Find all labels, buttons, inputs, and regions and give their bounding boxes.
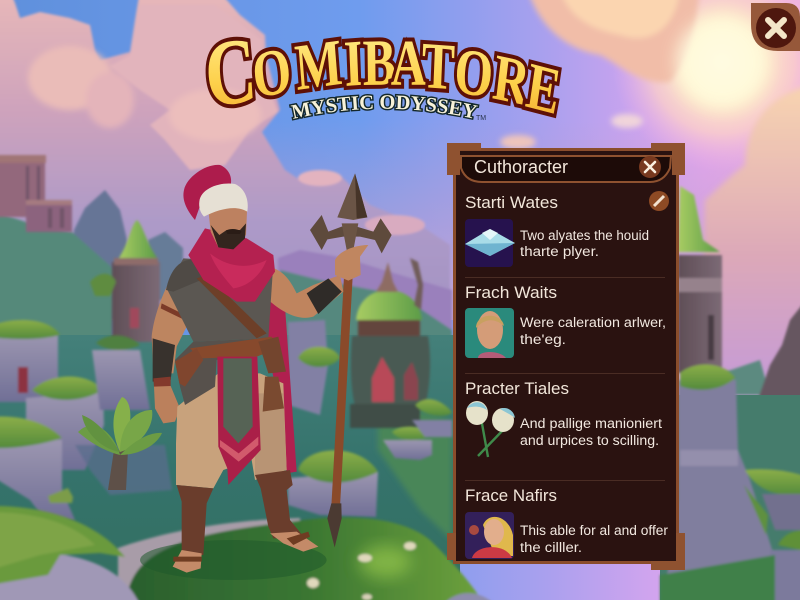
section: Frach Waits: Were caleration arlwer, [520,315,666,330]
trademark: TM [476,115,486,122]
left mossy tower [90,220,160,342]
scarf [188,228,275,302]
panel heading: Cuthoracter [474,157,568,177]
right arm [268,267,343,318]
strap [197,275,267,338]
bracer right [307,278,342,314]
panel: character info [447,143,685,570]
section: Frach Waits: the'eg. [520,332,566,347]
sun glow [676,16,768,108]
distant mountains [0,190,800,420]
section: Practer Tiales: and urpices to scilling. [520,433,659,448]
icon: crossed flowers [466,401,515,457]
panel frame [447,143,685,570]
turban [199,184,248,217]
loincloth [217,357,261,485]
hand [335,245,368,281]
icon: diamond [465,219,515,267]
pants [176,373,287,488]
palm plant [78,397,162,490]
ground [0,335,800,600]
header close icon [639,156,661,178]
ruined temple on left [0,155,72,232]
section: Frace Nafirs: Frace Nafirs [465,486,557,505]
title [201,17,565,129]
plume [183,165,231,220]
section: Frace Nafirs [465,486,669,559]
panel header bar [461,156,671,182]
title: COMIBATORE: C [201,17,260,127]
cape [267,300,297,473]
pouch left [175,348,203,387]
feet and sandals [173,550,202,573]
icon: woman portrait [465,512,514,559]
boots [177,485,213,555]
mossy rocks centre [288,320,452,517]
clouds: top right and right [500,0,800,395]
temple [350,258,430,428]
clouds: left cloud bank [0,0,450,300]
close button top right [751,3,800,51]
section: Starti Wates: Two alyates the houid [520,228,649,243]
section: Starti Wates [465,191,669,267]
spear [310,173,392,547]
section: Frace Nafirs: This able for al and offer [520,523,669,538]
section: Practer Tiales: Practer Tiales [465,379,569,398]
section: Starti Wates: tharte plyer. [520,244,599,259]
section: Frach Waits: Frach Waits [465,283,557,302]
character: warrior with spear [140,165,392,580]
beard [211,223,246,249]
pouch right and tassels [258,337,286,373]
rock pillars left [0,320,172,520]
title: COMIBATORE: OMIBATORE [249,25,565,129]
belt [190,337,278,358]
section: Frach Waits [465,283,666,358]
torso tunic [167,258,273,342]
section: Practer Tiales [465,379,662,457]
shadow under feet [140,540,327,580]
left arm [152,283,192,373]
bracer left [153,338,175,382]
edit icon [649,191,669,211]
section: Starti Wates: Starti Wates [465,193,558,212]
subtitle: MYSTIC ODYSSEY: MYSTIC ODYSSEY [288,94,480,121]
section: Practer Tiales: And pallige manioniert [520,416,662,431]
section: Frace Nafirs: the cilller. [520,540,582,555]
shoulder pad [166,259,205,292]
foreground hills [0,506,500,600]
green valley [378,400,452,540]
left hand [154,386,180,423]
head [208,203,247,248]
right tower and rocks [660,186,800,600]
icon: man portrait [465,308,514,358]
